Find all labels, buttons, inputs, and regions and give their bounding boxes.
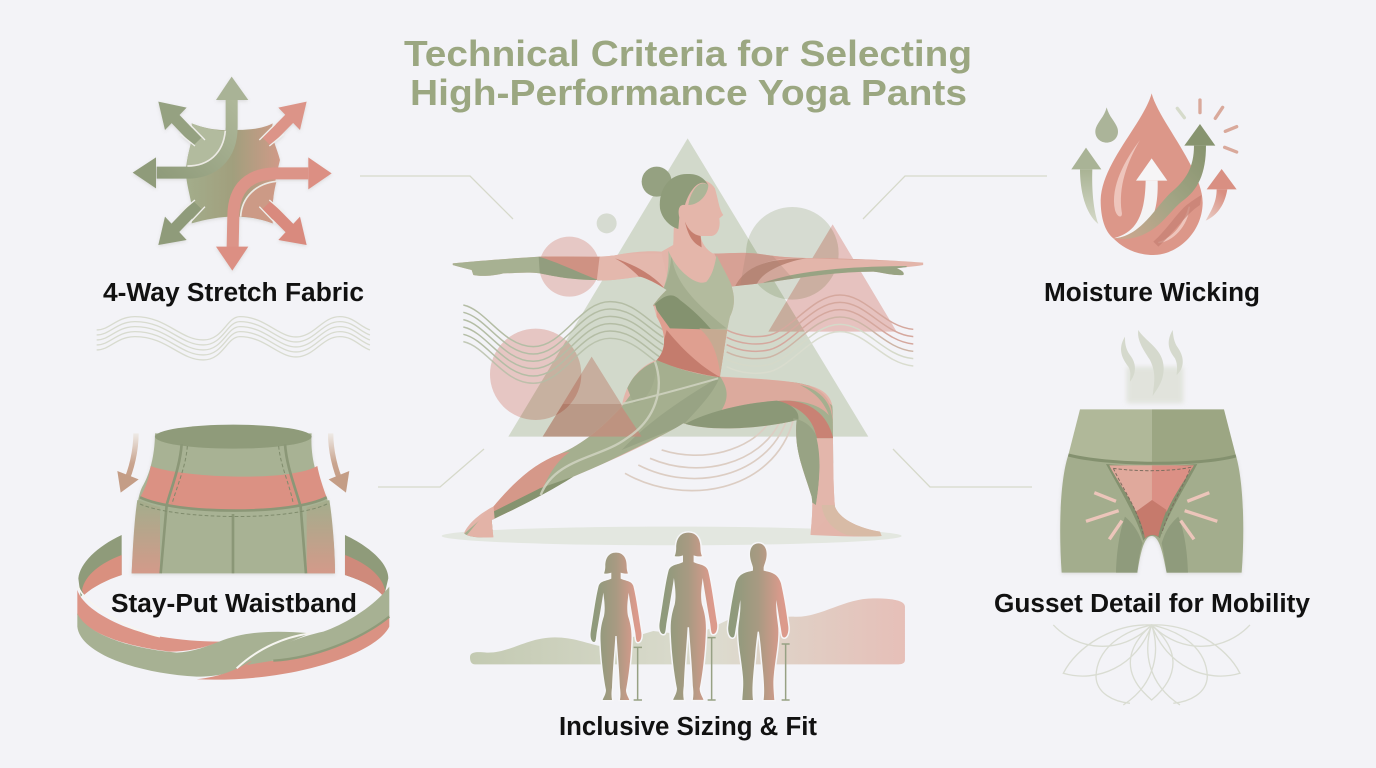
panel: gusset detail: [994, 330, 1311, 705]
panel: central yoga figure: [440, 130, 930, 547]
white arrow: [1113, 181, 1158, 238]
stem slashes: [180, 124, 284, 223]
label: 4-Way Stretch Fabric: [103, 279, 364, 307]
icon: droplet with arrows: [1071, 93, 1237, 255]
tension marks: [1086, 493, 1217, 539]
icon: shorts with gusset: [1060, 409, 1243, 573]
head: [642, 167, 723, 282]
connector lines: [360, 176, 1047, 487]
leg highlights: [541, 362, 718, 495]
pelvis and legs: [453, 360, 833, 543]
icon: steam: [1121, 330, 1183, 403]
translucent triangle over hip: [590, 406, 642, 436]
figure body: [452, 245, 924, 538]
person: plus size: [728, 543, 788, 700]
title: Technical Criteria for Selecting: [404, 33, 972, 74]
diagonal arrow stems: [171, 114, 294, 233]
large drop: [1101, 93, 1203, 255]
seams: [140, 444, 327, 573]
wave lines right: [727, 295, 913, 373]
wave lines left: [463, 302, 663, 383]
silhouette hill chart: [470, 598, 905, 664]
right arrow: [1206, 189, 1227, 221]
label: Moisture Wicking: [1044, 279, 1260, 307]
ring back: [78, 535, 122, 597]
label: Inclusive Sizing & Fit: [559, 713, 818, 741]
arrow: right downward: [329, 433, 349, 493]
tank top: [653, 251, 735, 330]
label: Stay-Put Waistband: [111, 590, 357, 618]
arrow: left downward: [117, 433, 139, 493]
panel: moisture wicking: [1044, 93, 1260, 307]
panel: stay-put waistband: [77, 425, 389, 680]
ground shadow: [442, 527, 902, 545]
person: tall: [659, 533, 717, 700]
arcs under thigh: [625, 420, 793, 491]
panel: inclusive sizing and fit: [470, 533, 905, 741]
waist: [657, 310, 728, 378]
icon: waistband: [77, 425, 389, 680]
small drop: [1095, 107, 1118, 143]
left arm: [452, 256, 602, 280]
label: Gusset Detail for Mobility: [994, 590, 1311, 618]
gusset panel: [1106, 464, 1197, 541]
wicking arrow: [1153, 195, 1202, 247]
panel: 4-way stretch fabric: [97, 77, 370, 360]
back leg shades: [492, 452, 570, 522]
decorative lotus: [1053, 625, 1250, 705]
decorative fabric waves: [97, 317, 370, 360]
title: High-Performance Yoga Pants: [410, 72, 967, 113]
measure bars: [634, 638, 790, 700]
icon: stretch arrows: [133, 77, 332, 271]
title: [404, 33, 972, 113]
geometric backdrop: [490, 138, 897, 437]
ring front: [77, 590, 220, 652]
person: small: [591, 553, 641, 700]
skirt body: [132, 433, 335, 573]
left arrow: [1080, 169, 1098, 224]
size figures: [591, 533, 790, 700]
right arm: [714, 252, 897, 289]
rays: [1177, 100, 1237, 152]
